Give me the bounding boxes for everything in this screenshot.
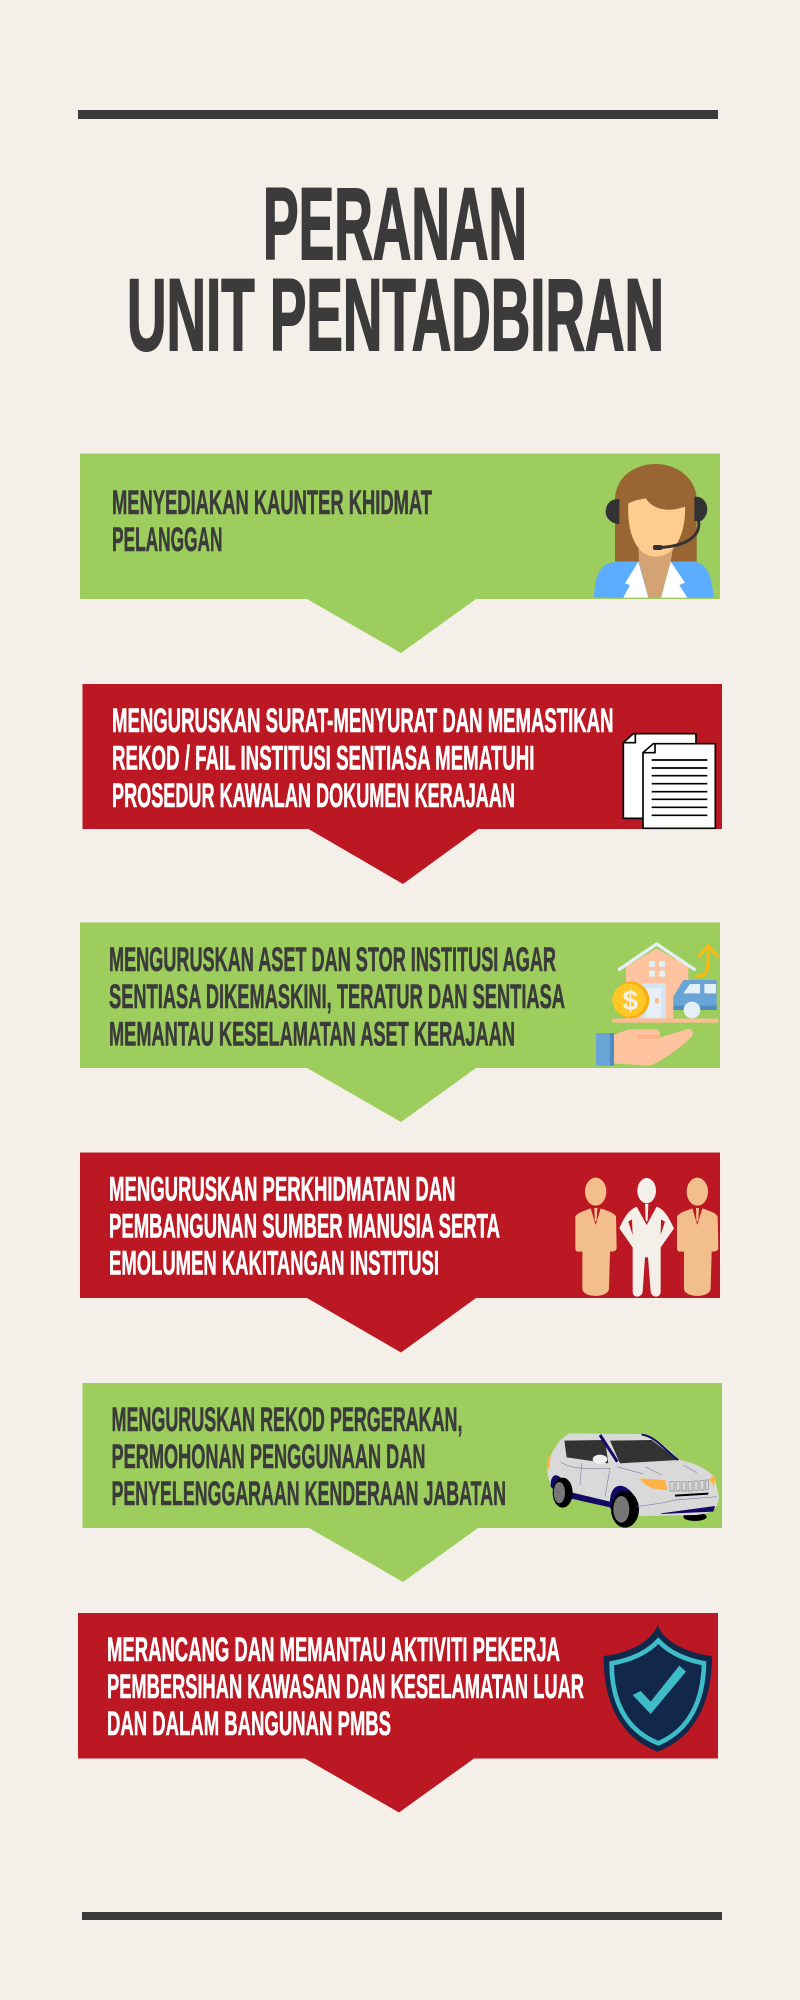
- green banner arrow 3: [80, 922, 720, 1122]
- text: correspondence and records: [112, 702, 614, 815]
- icon: call centre agent: [594, 464, 713, 598]
- text: assets and store: [109, 941, 565, 1054]
- icon: documents: [623, 734, 715, 828]
- icon: security shield: [604, 1624, 712, 1752]
- icon: three staff members: [575, 1178, 718, 1297]
- green banner arrow 5: [82, 1383, 722, 1582]
- bottom rule: [82, 1912, 722, 1920]
- icon: assets in hand: [596, 944, 719, 1066]
- text: cleaning and security: [107, 1631, 584, 1743]
- panel 6: cleaning and security: [78, 1613, 718, 1812]
- panel 3: assets and store: [80, 922, 720, 1122]
- panel 2: correspondence and records: [82, 684, 722, 884]
- icon: assets in hand: $: [623, 985, 639, 1016]
- top rule: [78, 110, 718, 119]
- text: human resources: [109, 1170, 500, 1282]
- text: vehicles: MENGURUSKAN REKOD PERGERAKAN,: [112, 1401, 462, 1439]
- icon: white SUV: [547, 1433, 719, 1528]
- title: [127, 167, 664, 372]
- text: vehicles: PERMOHONAN PENGGUNAAN DAN: [112, 1438, 425, 1476]
- red banner arrow 6: [78, 1613, 718, 1812]
- text: customer counter: PELANGGAN: [112, 521, 222, 559]
- text: vehicles: [112, 1401, 506, 1513]
- text: human resources: MENGURUSKAN PERKHIDMATAN DAN: [109, 1170, 456, 1208]
- red banner arrow 2: [82, 684, 722, 884]
- panel 5: vehicles: [82, 1383, 722, 1582]
- green banner arrow 1: [80, 454, 720, 653]
- panel 4: human resources: [80, 1152, 720, 1352]
- panel 1: customer counter: [80, 454, 720, 653]
- text: cleaning and security: DAN DALAM BANGUNAN PMBS: [107, 1705, 391, 1743]
- red banner arrow 4: [80, 1152, 720, 1352]
- title: PERANAN: [263, 167, 527, 281]
- text: human resources: EMOLUMEN KAKITANGAN INSTITUSI: [109, 1244, 439, 1282]
- text: customer counter: MENYEDIAKAN KAUNTER KHIDMAT: [112, 484, 432, 522]
- text: customer counter: [112, 484, 432, 559]
